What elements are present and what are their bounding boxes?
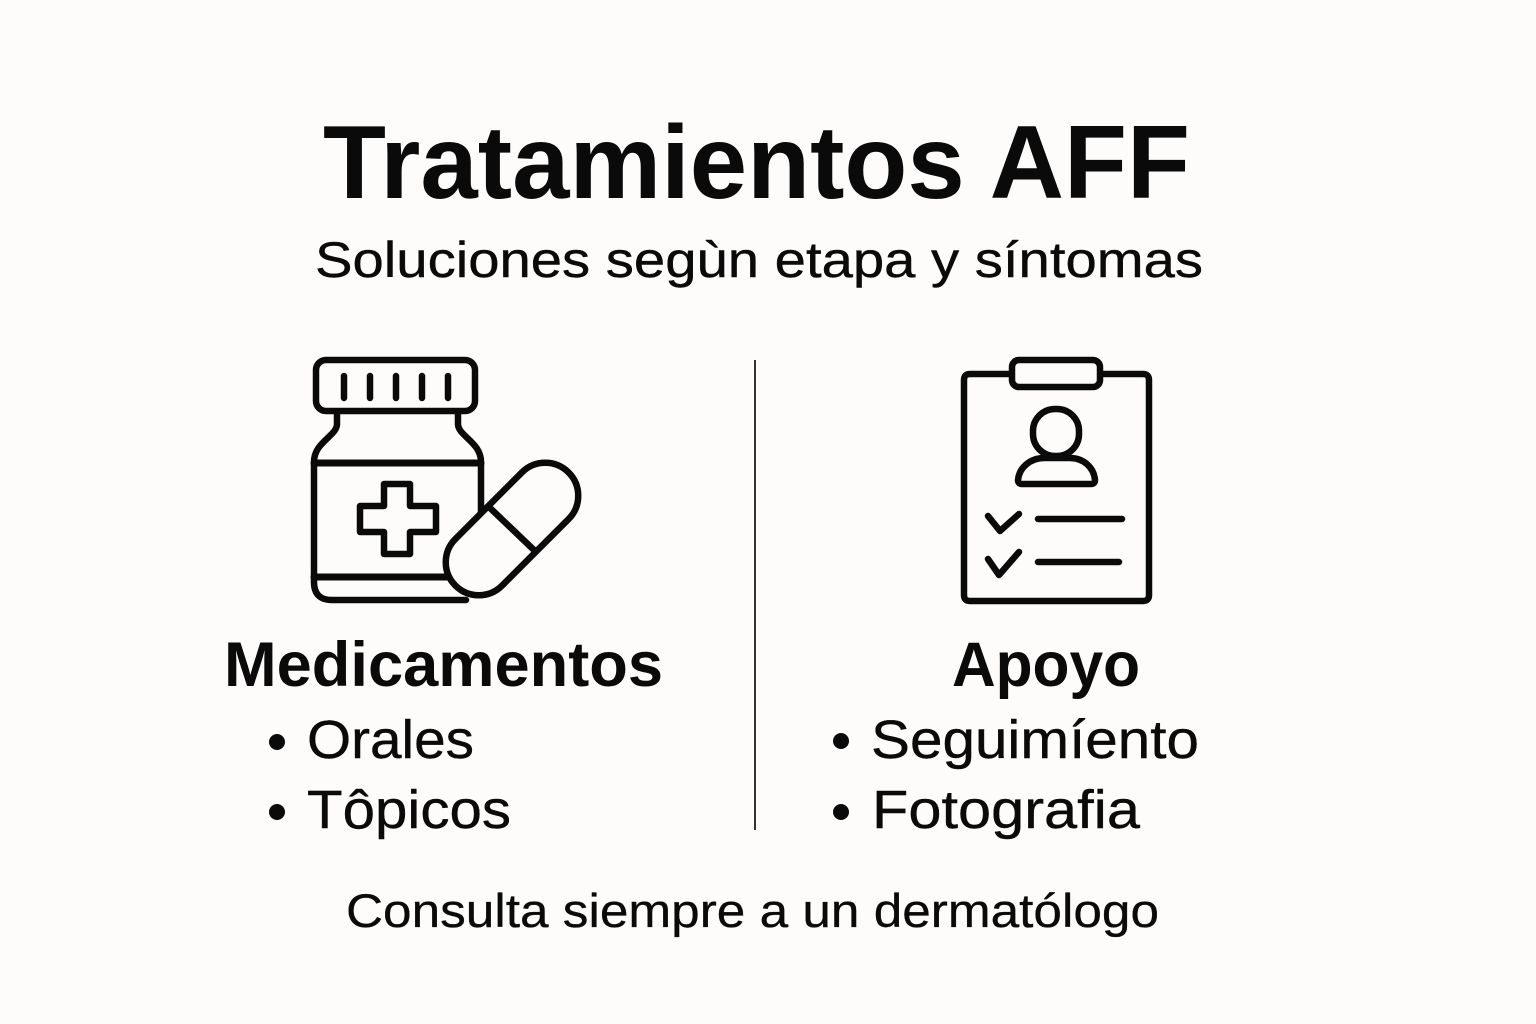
bullet — [269, 734, 285, 750]
bottle body — [314, 412, 481, 600]
bullet — [269, 804, 285, 820]
cap ridges — [344, 376, 448, 398]
clip — [1012, 360, 1100, 387]
icon: clipboard with patient record — [964, 360, 1149, 601]
clipboard board — [964, 374, 1149, 601]
title: Tratamientos AFF — [323, 105, 1190, 221]
item: Orales: Orales — [307, 710, 474, 770]
check lines — [1038, 519, 1122, 562]
left column heading: Medicamentos — [224, 630, 663, 700]
person head — [1033, 409, 1079, 456]
subtitle: Soluciones segùn etapa y síntomas — [315, 232, 1203, 288]
footer note: Consulta siempre a un dermatólogo — [346, 884, 1159, 937]
bullet — [833, 804, 849, 820]
right column heading: Apoyo — [952, 630, 1140, 700]
item: Tôpicos: Tôpicos — [307, 780, 511, 840]
bullet — [833, 733, 849, 749]
bottle label lines — [314, 463, 481, 577]
checkmarks — [988, 514, 1019, 575]
divider — [754, 360, 756, 830]
bottle cap — [316, 360, 475, 411]
item: Fotografia: Fotografia — [872, 780, 1141, 840]
capsule — [432, 449, 592, 609]
right column list — [833, 710, 1199, 840]
icon: medicine bottle and capsule — [314, 360, 592, 609]
left column list — [269, 710, 511, 840]
cross — [360, 484, 436, 554]
item: Seguimíento: Seguimíento — [871, 710, 1199, 770]
person shoulders — [1018, 458, 1095, 484]
